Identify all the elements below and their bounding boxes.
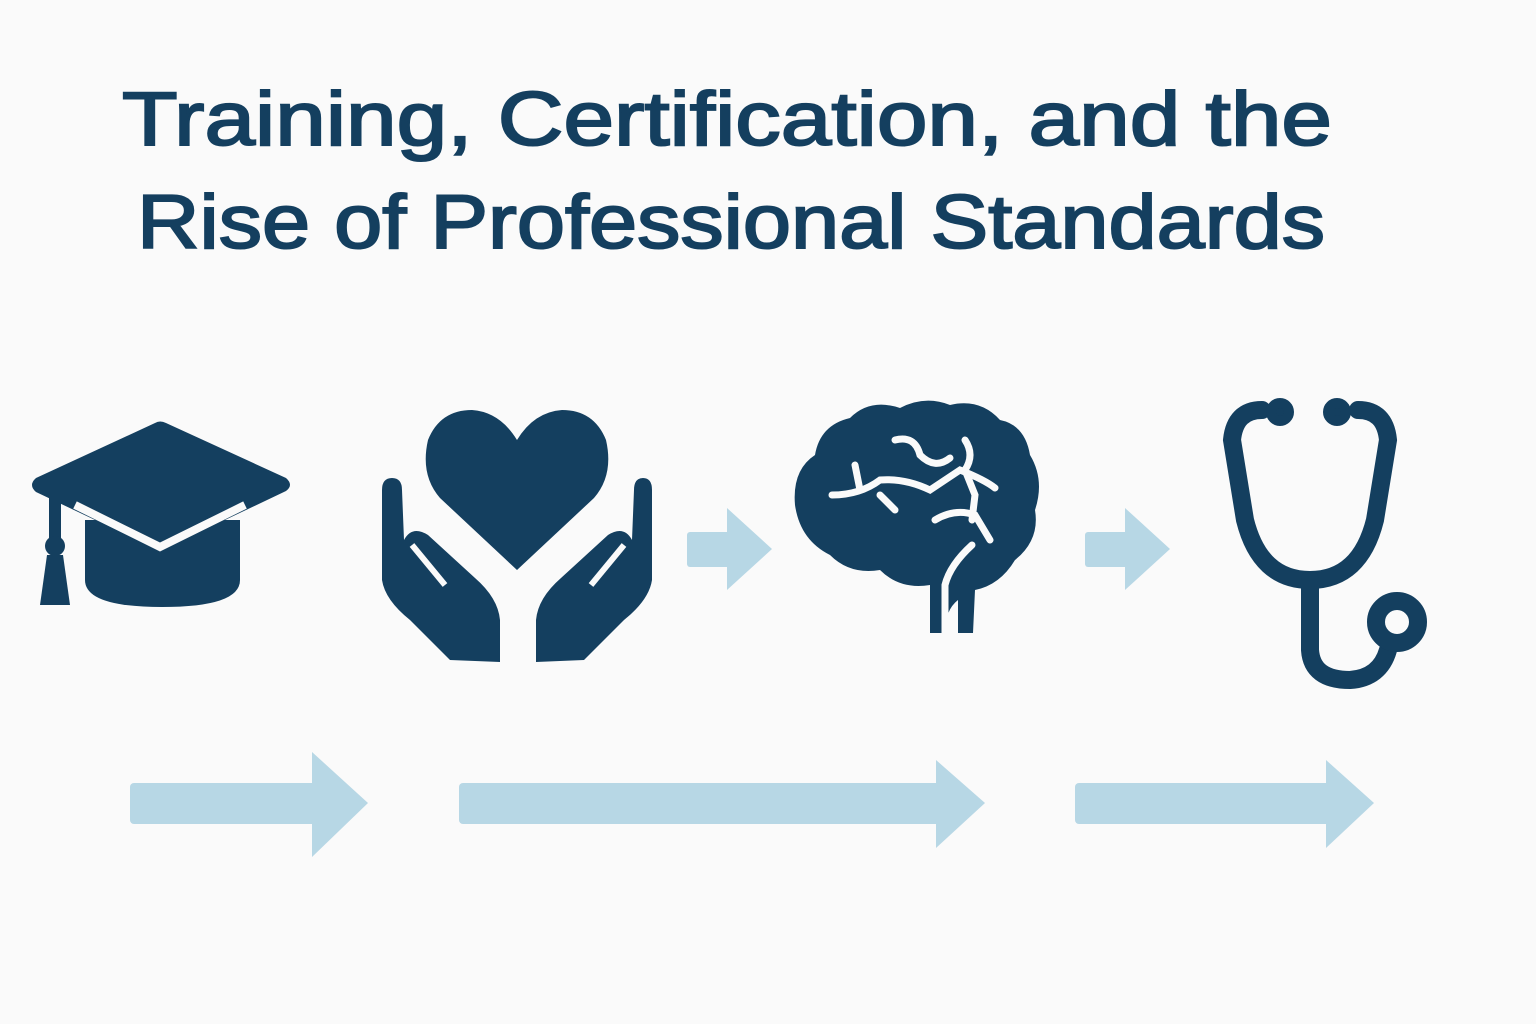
icon: hands with heart <box>382 410 652 662</box>
title: Training, Certification, and the <box>122 77 1332 162</box>
arrow: large 2 <box>459 760 985 848</box>
icon: graduation cap <box>32 422 290 607</box>
arrow: large 1 <box>130 752 368 857</box>
icon: brain <box>795 401 1039 633</box>
arrow: large 3 <box>1075 760 1374 848</box>
arrow: small 1 <box>687 508 772 590</box>
title <box>122 77 1332 265</box>
title: Rise of Professional Standards <box>137 180 1325 265</box>
arrow: small 2 <box>1085 508 1170 590</box>
icon: stethoscope <box>1232 407 1418 680</box>
